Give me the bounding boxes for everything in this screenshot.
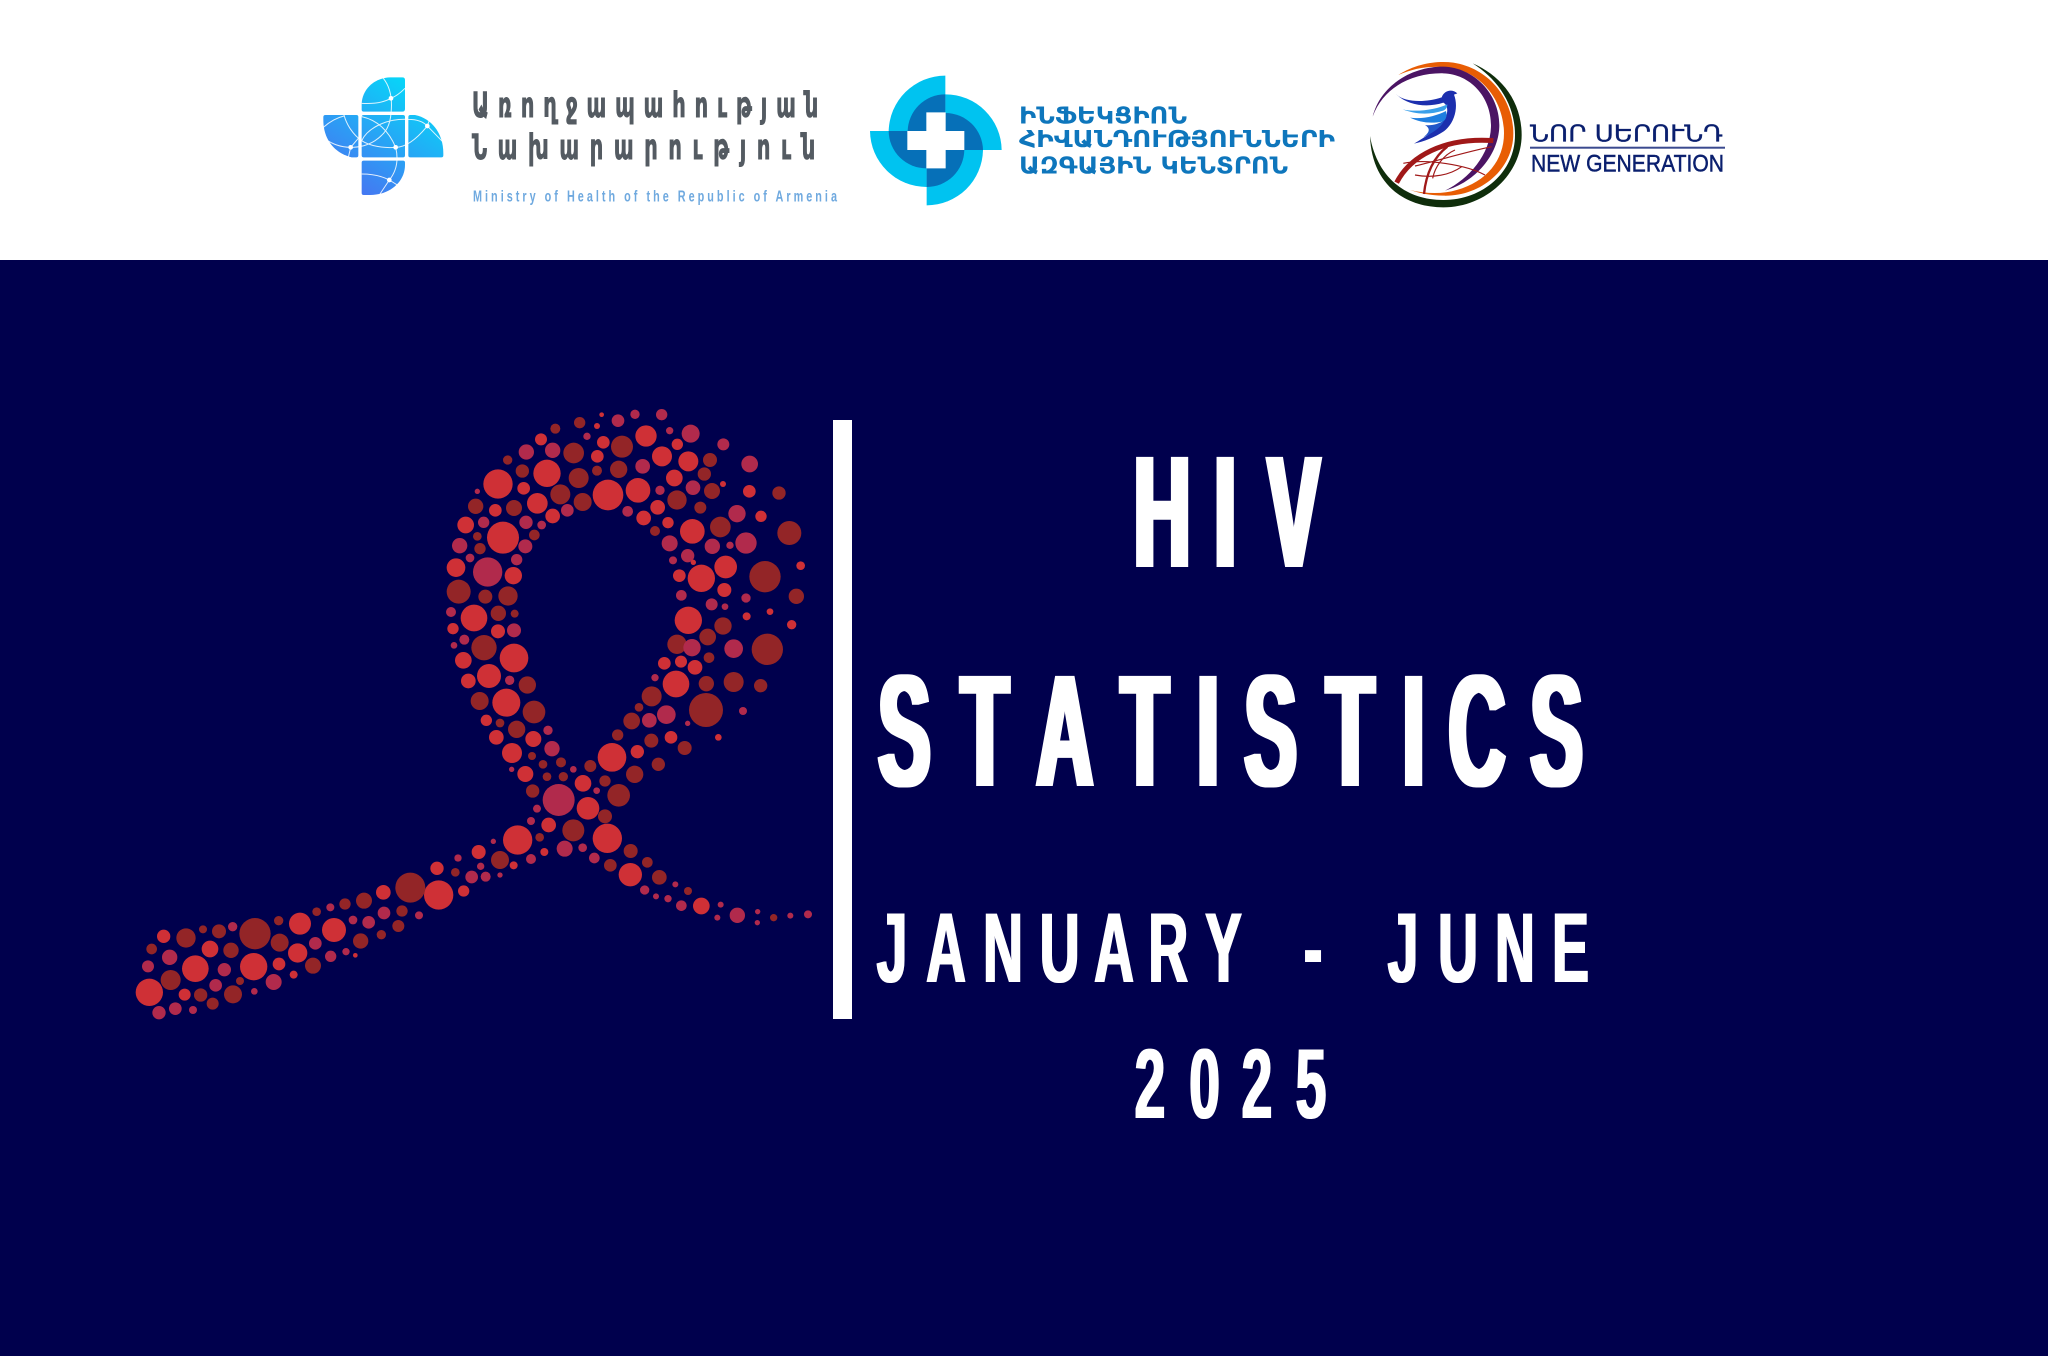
bird — [1396, 91, 1457, 144]
icon: bird and globe in rings — [1370, 62, 1522, 207]
English name: NEW GENERATION — [1531, 151, 1724, 178]
heading: STATISTICS: STATISTICS — [878, 641, 1583, 820]
logo: New Generation — [1370, 62, 1725, 207]
ministry name in Armenian — [472, 84, 818, 167]
header white band — [0, 0, 2048, 260]
icon: blue pinwheel with white cross — [870, 76, 1002, 205]
Armenian name: ՆՈՐ ՍԵՐՈՒՆԴ — [1530, 122, 1723, 148]
icon: ministry cross globe — [323, 77, 443, 195]
centre name in Armenian: ՀԻՎԱՆԴՈՒԹՅՈՒՆՆԵՐԻ — [1019, 127, 1335, 153]
centre name in Armenian: ԻՆՖԵԿՑԻՈՆ — [1019, 104, 1188, 130]
centre name in Armenian: ԱԶԳԱՅԻՆ ԿԵՆՏՐՈՆ — [1019, 154, 1289, 180]
centre name in Armenian — [1019, 104, 1335, 180]
ministry name in Armenian: Առողջապահության — [472, 84, 818, 125]
white vertical divider bar — [833, 420, 852, 1019]
ministry name in Armenian: Նախարարություն — [472, 126, 815, 167]
heading: HIV: HIV — [1134, 422, 1320, 601]
ministry name in English: Ministry of Health of the Republic of Armenia — [473, 188, 837, 205]
chart: red ribbon made of dots — [136, 409, 812, 1019]
subheading: year 2025: 2025 — [1135, 1028, 1326, 1139]
subheading: January - June: JANUARY - JUNE — [877, 892, 1589, 1003]
logo: Ministry of Health — [323, 77, 837, 205]
logo: National Centre for Infectious Diseases — [870, 76, 1335, 205]
